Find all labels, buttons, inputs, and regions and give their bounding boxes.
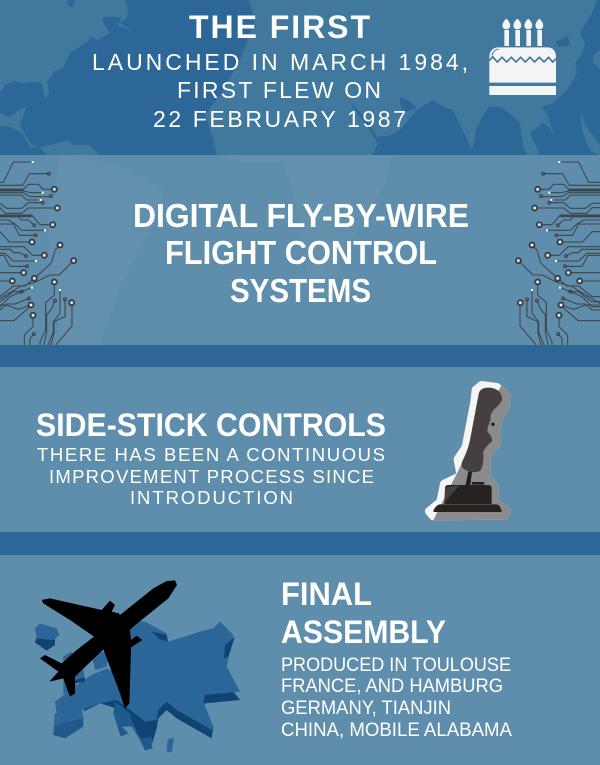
panel: side-stick controls: [0, 367, 600, 532]
map: europe: [35, 620, 240, 753]
heading: digital fly-by-wire: [133, 197, 469, 309]
circuit: right: [516, 161, 600, 347]
text block: improvement: INTRODUCTION: [130, 487, 293, 508]
heading: final assembly: ASSEMBLY: [281, 614, 446, 650]
panel: digital fly-by-wire: [0, 155, 600, 345]
heading: final assembly: [281, 576, 446, 650]
text block: launch dates: LAUNCHED IN MARCH 1984,: [92, 49, 468, 75]
text block: launch dates: [92, 49, 468, 132]
heading: digital fly-by-wire: FLIGHT CONTROL: [165, 234, 437, 271]
band: divider: [0, 532, 600, 555]
panel: final assembly: [0, 555, 600, 765]
text block: production sites: PRODUCED IN TOULOUSE: [281, 655, 511, 676]
text block: production sites: [281, 655, 512, 741]
circuit: left: [0, 161, 76, 347]
icon: birthday cake: [489, 19, 556, 95]
band: divider: [0, 345, 600, 367]
heading: the first: THE FIRST: [189, 9, 370, 45]
icon: airplane: [40, 580, 177, 708]
panel: header with world map: [0, 0, 600, 156]
text block: improvement: [37, 444, 385, 508]
heading: side-stick controls: SIDE-STICK CONTROLS: [36, 407, 386, 443]
icon: side-stick joystick: [429, 385, 507, 516]
text block: production sites: GERMANY, TIANJIN: [281, 698, 451, 719]
text block: improvement: THERE HAS BEEN A CONTINUOUS: [37, 444, 385, 465]
text block: improvement: IMPROVEMENT PROCESS SINCE: [49, 466, 374, 487]
text block: launch dates: FIRST FLEW ON: [177, 77, 381, 103]
text block: production sites: FRANCE, AND HAMBURG: [281, 676, 503, 697]
heading: final assembly: FINAL: [281, 576, 372, 612]
heading: digital fly-by-wire: DIGITAL FLY-BY-WIRE: [133, 197, 469, 234]
text block: production sites: CHINA, MOBILE ALABAMA: [281, 720, 512, 741]
text block: launch dates: 22 FEBRUARY 1987: [153, 106, 406, 132]
heading: digital fly-by-wire: SYSTEMS: [230, 272, 371, 309]
